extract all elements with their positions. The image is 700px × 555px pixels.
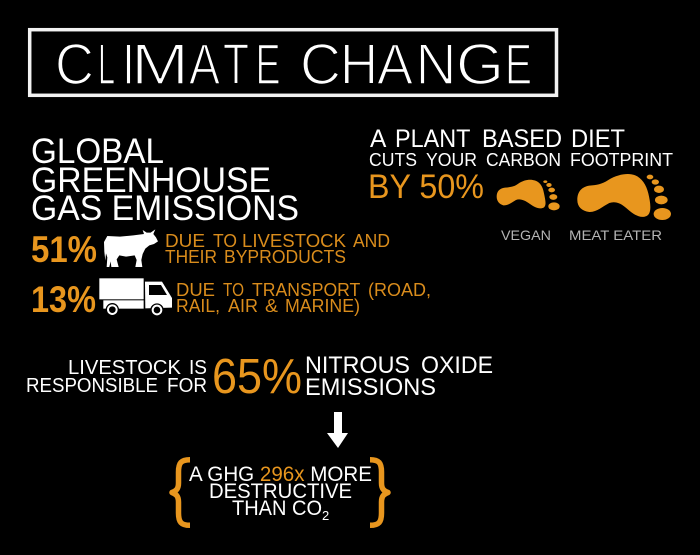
- arrow: down: [327, 412, 348, 448]
- title: H: [340, 33, 378, 97]
- stat: 51 percent: 51%: [31, 229, 97, 270]
- title: C: [55, 33, 94, 97]
- text: due to transport: RAIL,: [176, 296, 220, 316]
- text: livestock is responsible for: LIVESTOCK: [68, 357, 182, 379]
- subheading: cuts your carbon footprint: FOOTPRINT: [570, 150, 673, 170]
- title: I: [122, 33, 135, 97]
- heading: a plant based diet: BASED: [482, 125, 562, 153]
- icon: truck: [99, 278, 172, 317]
- title: E: [256, 33, 280, 97]
- heading: global greenhouse gas emissions: GREENHOUSE: [31, 161, 271, 200]
- title: N: [416, 33, 456, 97]
- icon: cow: [104, 229, 158, 267]
- text: due to transport: MARINE): [285, 296, 360, 316]
- title: A: [377, 33, 414, 97]
- heading: a plant based diet: DIET: [571, 125, 625, 153]
- text: nitrous oxide emissions: [305, 352, 493, 401]
- text: due to transport: TO: [223, 280, 244, 300]
- text: nitrous oxide emissions: NITROUS: [305, 352, 410, 379]
- text: nitrous oxide emissions: EMISSIONS: [305, 374, 436, 401]
- title: C: [300, 33, 341, 97]
- heading: global greenhouse gas emissions: [31, 132, 299, 228]
- title: M: [131, 33, 189, 97]
- text: due to transport: [176, 280, 431, 316]
- text: due to transport: (ROAD,: [368, 280, 431, 300]
- text: destructive: DESTRUCTIVE: [209, 480, 352, 503]
- callout: ghg 296x more destructive: [172, 460, 388, 525]
- subheading: cuts your carbon footprint: CUTS: [369, 150, 417, 170]
- stat: 65 percent: 65%: [212, 350, 302, 404]
- title: E: [505, 33, 532, 97]
- text: due to livestock: TO: [213, 231, 237, 251]
- panel: nitrous oxide: [26, 350, 493, 404]
- right brace: [370, 460, 388, 525]
- text: livestock is responsible for: IS: [189, 357, 207, 379]
- label: meat eater: MEAT EATER: [569, 227, 662, 243]
- stat: by 50 percent: BY 50%: [368, 168, 484, 206]
- text: due to livestock: AND: [353, 231, 390, 251]
- title: A: [189, 33, 221, 97]
- text: nitrous oxide emissions: OXIDE: [421, 352, 493, 379]
- heading: global greenhouse gas emissions: GLOBAL: [31, 132, 164, 171]
- icon: meat eater footprint: [577, 174, 671, 220]
- label: vegan: VEGAN: [501, 227, 551, 243]
- text: a ghg 296x more: A GHG 296x MORE: [189, 463, 372, 486]
- heading: a plant based diet: PLANT: [395, 125, 470, 153]
- panel: global greenhouse gas emissions: [31, 132, 431, 320]
- text: due to livestock: LIVESTOCK: [242, 231, 346, 251]
- title: [30, 30, 556, 97]
- title: L: [98, 33, 115, 97]
- text: livestock is responsible for: RESPONSIBLE: [26, 375, 158, 397]
- heading: global greenhouse gas emissions: GAS EMISSIONS: [31, 189, 299, 228]
- text: livestock is responsible for: FOR: [167, 375, 207, 397]
- text: due to transport: AIR: [228, 296, 258, 316]
- text: due to transport: TRANSPORT: [252, 280, 360, 300]
- text: than co2: 2: [322, 508, 329, 523]
- panel: plant based diet: [368, 125, 673, 243]
- icon: vegan footprint: [497, 180, 560, 210]
- text: due to transport: &: [265, 296, 278, 316]
- stat: 13 percent: 13%: [31, 279, 96, 320]
- text: due to livestock: THEIR: [165, 247, 217, 267]
- text: livestock is responsible for: [26, 357, 207, 397]
- subheading: cuts your carbon footprint: CARBON: [486, 150, 561, 170]
- text: than co2: THAN CO: [232, 497, 322, 520]
- title: T: [223, 33, 249, 97]
- heading: a plant based diet: A: [370, 125, 387, 153]
- text: due to livestock: DUE: [165, 231, 205, 251]
- left brace: [172, 460, 190, 525]
- title: G: [456, 33, 504, 97]
- text: due to livestock: [165, 231, 390, 267]
- text: due to livestock: BYPRODUCTS: [224, 247, 346, 267]
- subheading: cuts your carbon footprint: YOUR: [426, 150, 477, 170]
- text: due to transport: DUE: [176, 280, 215, 300]
